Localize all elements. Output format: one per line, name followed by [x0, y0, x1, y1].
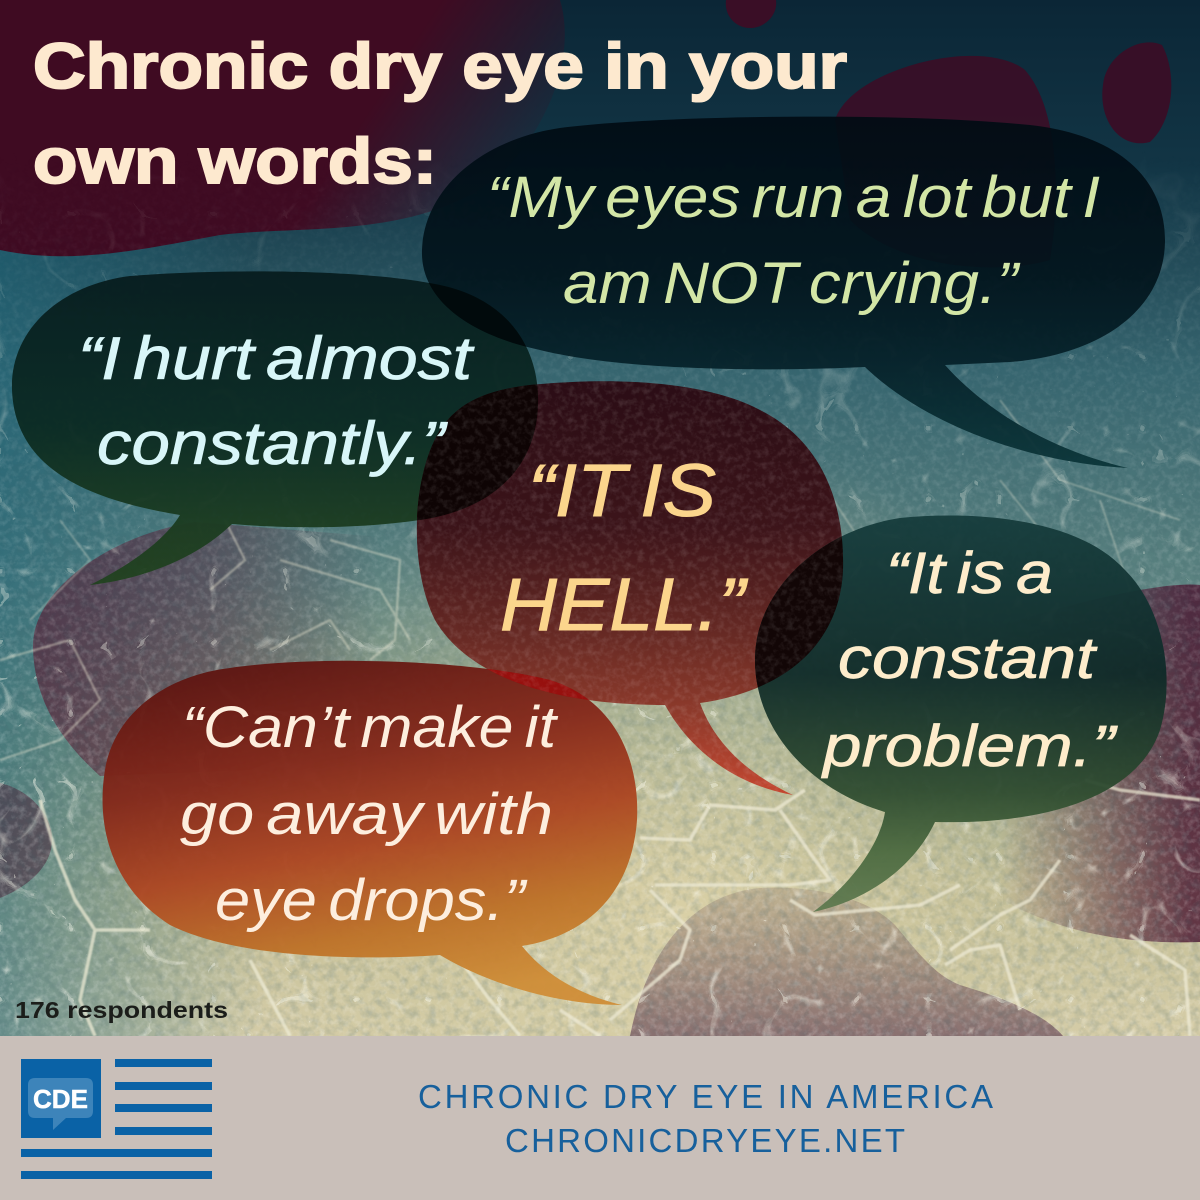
speech bubble: it is a constant problem [755, 516, 1167, 912]
footer band [0, 1036, 1200, 1200]
title: Chronic dry eye in your [33, 30, 847, 102]
quote: can't make it go away: “Can’t make it [182, 695, 559, 760]
quote: it is a constant problem: problem.” [821, 714, 1118, 779]
quote: I hurt almost constantly [78, 325, 475, 477]
bubble overlaps [416, 283, 844, 794]
title: own words: [33, 125, 437, 197]
quote: I hurt almost constantly: constantly.” [97, 410, 448, 477]
speech bubble: it is hell [417, 381, 843, 795]
quote: it is a constant problem: “It is a [886, 541, 1053, 606]
footer text: CHRONIC DRY EYE IN AMERICA [418, 1078, 993, 1115]
speech bubble: can't make it go away [103, 661, 637, 1005]
quote: my eyes run a lot [487, 165, 1100, 316]
speech bubble: I hurt almost constantly [12, 271, 538, 585]
quote: can't make it go away: eye drops.” [215, 868, 528, 933]
icon: CDE flag logo: CDE [33, 1084, 88, 1114]
quote: I hurt almost constantly: “I hurt almost [78, 325, 475, 392]
quote: my eyes run a lot: am NOT crying.” [563, 251, 1021, 316]
icon: CDE flag logo [21, 1059, 212, 1179]
footer text [418, 1078, 993, 1159]
quote: it is a constant problem: constant [838, 626, 1098, 691]
quote: it is hell: HELL.” [500, 563, 749, 646]
cracked earth lines [0, 187, 1200, 1036]
quote: can't make it go away: go away with [180, 782, 553, 847]
footer text: CHRONICDRYEYE.NET [505, 1122, 905, 1159]
speech bubble: my eyes run a lot [422, 117, 1165, 468]
quote: it is hell: “IT IS [528, 449, 716, 532]
respondent count: 176 respondents [15, 997, 228, 1023]
bubble texture [417, 382, 843, 794]
quote: my eyes run a lot: “My eyes run a lot but I [487, 165, 1100, 230]
quote: it is a constant problem [821, 541, 1118, 779]
title [33, 30, 847, 197]
quote: can't make it go away [180, 695, 559, 933]
quote: it is hell [500, 449, 749, 646]
